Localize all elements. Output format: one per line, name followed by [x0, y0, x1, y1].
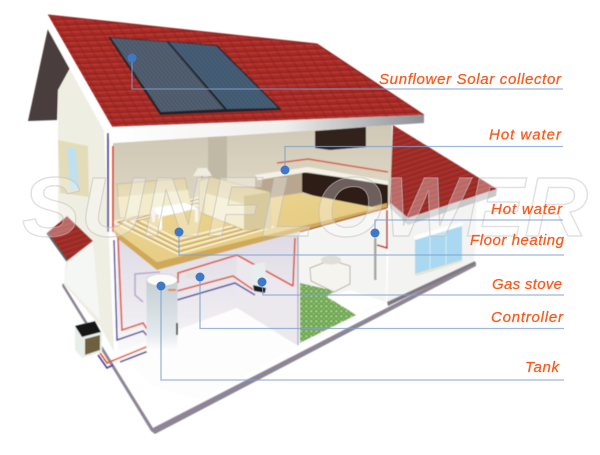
leader: gas stove — [262, 282, 564, 295]
bathroom — [298, 209, 387, 345]
leader: tank — [161, 286, 564, 380]
lower room walls — [117, 231, 300, 400]
right roof — [390, 125, 497, 225]
main roof — [46, 15, 424, 143]
right wall base edge — [387, 261, 475, 306]
label: Gas stove: Gas stove — [492, 276, 562, 293]
leader: controller — [200, 277, 564, 328]
left wall — [58, 69, 114, 352]
kitchen red pipe — [277, 159, 388, 172]
sofa left — [117, 178, 192, 218]
lower left wall extension — [64, 242, 100, 320]
solar collector — [108, 37, 282, 115]
sofa right — [199, 177, 271, 230]
bathroom red pipe — [377, 210, 387, 248]
label: Hot water lower: Hot water — [491, 201, 563, 218]
vertical pipes upper level — [108, 133, 113, 232]
blue return pipe — [177, 283, 255, 300]
controller box — [186, 272, 196, 278]
kitchen — [255, 127, 388, 208]
right wall — [387, 203, 477, 302]
front fascia — [112, 115, 424, 143]
house illustration — [28, 15, 497, 434]
outdoor unit — [75, 321, 102, 358]
red pipe to outdoor unit — [100, 345, 151, 363]
blue pipe to outdoor unit — [98, 355, 113, 368]
gable trim — [46, 16, 113, 143]
leader: floor heating — [179, 232, 564, 255]
small left roof — [47, 216, 93, 261]
tan counter unit — [255, 172, 302, 200]
dark base cabinets — [302, 172, 388, 208]
marker dots — [128, 54, 380, 290]
gable underside — [28, 28, 70, 121]
label: Floor heating: Floor heating — [470, 232, 565, 249]
leader: hot water upper — [285, 146, 563, 170]
vanity unit — [310, 256, 350, 292]
upper red pipe — [178, 255, 293, 286]
blue pipe to tank — [120, 350, 151, 362]
red pipes on partition — [293, 238, 295, 286]
label: Controller: Controller — [491, 309, 564, 326]
wall cabinet — [315, 127, 366, 150]
upper room back wall — [113, 125, 392, 233]
leader lines — [132, 58, 564, 380]
label: Hot water upper: Hot water — [489, 126, 562, 144]
floor heating coils — [113, 197, 273, 254]
partition edge — [297, 236, 299, 345]
pale loop — [135, 272, 160, 302]
hot water tank — [146, 274, 178, 352]
label: Sunflower Solar collector: Sunflower Solar collector — [379, 71, 562, 88]
wooden floor slab — [113, 193, 387, 270]
shower tray — [327, 290, 385, 315]
circulation pipes lower level — [98, 210, 387, 368]
left wall window — [58, 140, 89, 197]
left blue riser — [114, 240, 150, 340]
base plate — [62, 200, 476, 434]
left red riser — [118, 238, 149, 332]
label: Tank: Tank — [525, 359, 560, 376]
green floor — [300, 283, 356, 343]
leader: hot water lower — [375, 220, 563, 233]
leader: solar collector — [132, 58, 563, 89]
coffee table — [152, 203, 198, 229]
watermark: SUNFLOWER: SUNFLOWER — [22, 160, 588, 254]
middle red pipe — [177, 276, 255, 291]
shower column — [374, 238, 376, 280]
white countertop — [255, 167, 388, 185]
lamp — [193, 168, 212, 194]
roof shadow edge — [48, 15, 424, 115]
right window — [414, 222, 462, 276]
gas stove — [252, 262, 267, 293]
